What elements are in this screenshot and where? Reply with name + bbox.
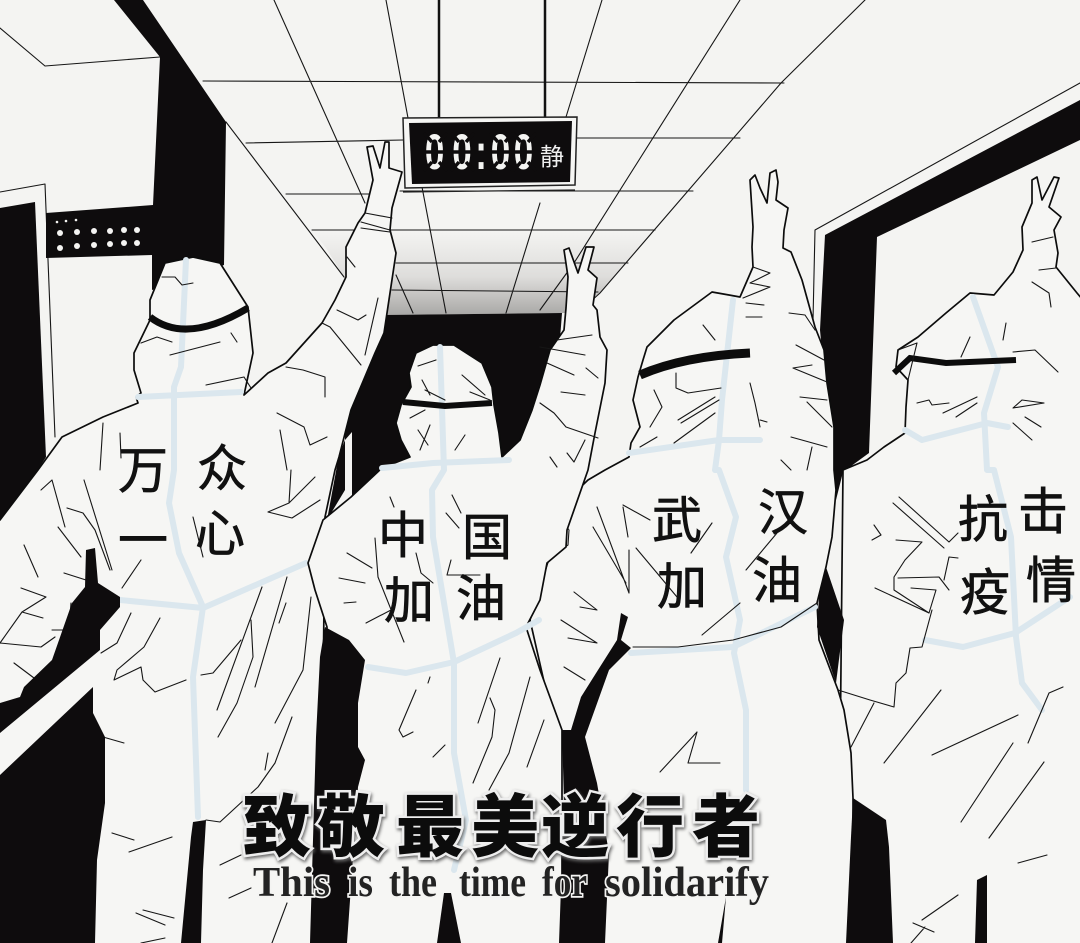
subtitle: solidarify [605,860,769,906]
black column 1 [181,820,206,943]
back text: figure 4: 情 [1026,553,1076,609]
left black shape above diagonal strip [0,548,120,733]
black column 5 [846,798,893,943]
seams [120,260,306,817]
subtitle: for [542,860,587,906]
right door outer frame line [813,83,1080,320]
wrinkles [780,237,1063,943]
wrinkles [339,335,598,790]
wrinkles [550,267,832,772]
figure 3 [530,170,853,943]
black sliver beside door strip [327,440,345,520]
clock digit segment gaps [420,133,536,171]
wrinkles [0,213,392,943]
black column 6 [975,875,987,943]
eye band [894,358,1016,373]
back text: figure 1: 心 [195,506,245,562]
waist outline [633,603,817,647]
subtitle: the [389,860,437,906]
black sliver [718,897,726,943]
black column 2 [310,627,365,943]
figure 2 [308,247,607,943]
back text: figure 2: 加 [384,573,434,629]
back text: figure 3: 汉 [758,485,808,541]
seams [368,347,539,870]
back text: figure 4: 抗 [958,492,1008,548]
eye band [403,402,492,406]
bottom-left black block [0,687,105,943]
black diamond between figures [817,567,844,683]
subtitle: is [348,860,373,906]
back text: figure 1: 众 [197,441,247,497]
back text: figure 3: 武 [652,493,702,549]
black right doorway frame [820,100,1080,500]
clock digits: 00:00 [425,125,533,181]
back text: figure 3: 油 [752,553,802,609]
back text: figure 3: 加 [657,559,707,615]
back text: figure 1: 万 [118,443,168,499]
wall clock [403,0,577,192]
subtitle: This [253,860,330,906]
corridor ceiling grid [203,0,865,322]
white door strip [345,432,352,505]
back text: figure 1: 一 [118,513,168,569]
back text: figure 2: 中 [378,508,428,564]
eye band [640,353,750,375]
silence sign character: 静 [540,144,564,171]
title: 致敬最美逆行者 [243,790,760,866]
subtitle [253,860,769,906]
back text: figure 2 [378,508,512,629]
black pillar and beam with dots [46,0,226,290]
gap shapes between the figures [0,548,987,943]
eye band [150,308,248,329]
back text: figure 2: 国 [462,510,512,566]
black left doorway [0,202,46,530]
black column 3 [437,893,461,943]
figure 4 [780,177,1080,943]
back text: figure 3 [652,485,808,615]
back text: figure 2: 油 [456,571,506,627]
back text: figure 4: 击 [1018,484,1068,540]
back text: figure 4: 疫 [960,565,1010,621]
back text: figure 1 [118,441,247,569]
seams [629,300,815,790]
black central doorway [345,313,562,520]
black column 4 [559,613,631,943]
back text: figure 4 [958,484,1076,621]
subtitle: time [459,860,526,906]
left wall lines and door frame [0,28,160,437]
seams [905,297,1070,710]
figure 1 [0,142,402,943]
